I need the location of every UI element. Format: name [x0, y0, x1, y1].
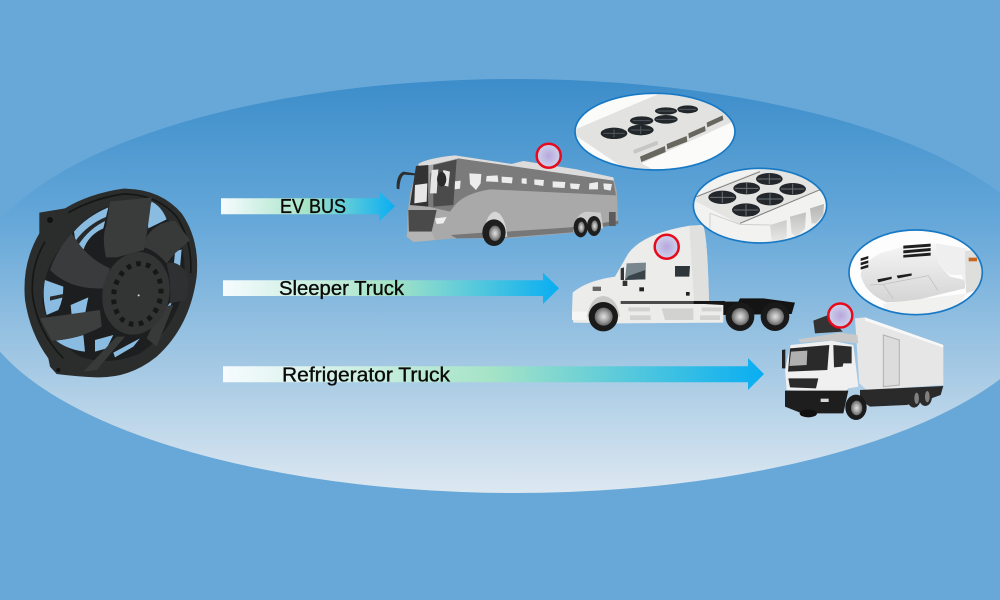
marker: sleeper AC location — [655, 235, 679, 259]
central ellipse — [0, 79, 1000, 493]
fan photo — [24, 189, 197, 377]
sleeper truck — [572, 225, 795, 331]
arrow: EV bus — [221, 191, 395, 222]
arrow: sleeper truck — [223, 273, 559, 304]
EV bus — [397, 155, 618, 246]
callout: refrigerator AC unit — [849, 230, 983, 317]
label: Sleeper Truck: Sleeper Truck — [279, 278, 405, 300]
marker: bus AC location — [537, 144, 561, 168]
refrigerator truck — [782, 315, 943, 420]
callout: sleeper AC unit — [690, 167, 830, 243]
label: EV BUS: EV BUS — [280, 196, 346, 218]
infographic canvas — [0, 79, 1000, 493]
marker: refrigerator AC location — [828, 304, 852, 328]
callout: bus AC unit — [570, 92, 737, 173]
arrow: refrigerator truck — [223, 358, 764, 390]
label: Refrigerator Truck: Refrigerator Truck — [282, 364, 451, 386]
